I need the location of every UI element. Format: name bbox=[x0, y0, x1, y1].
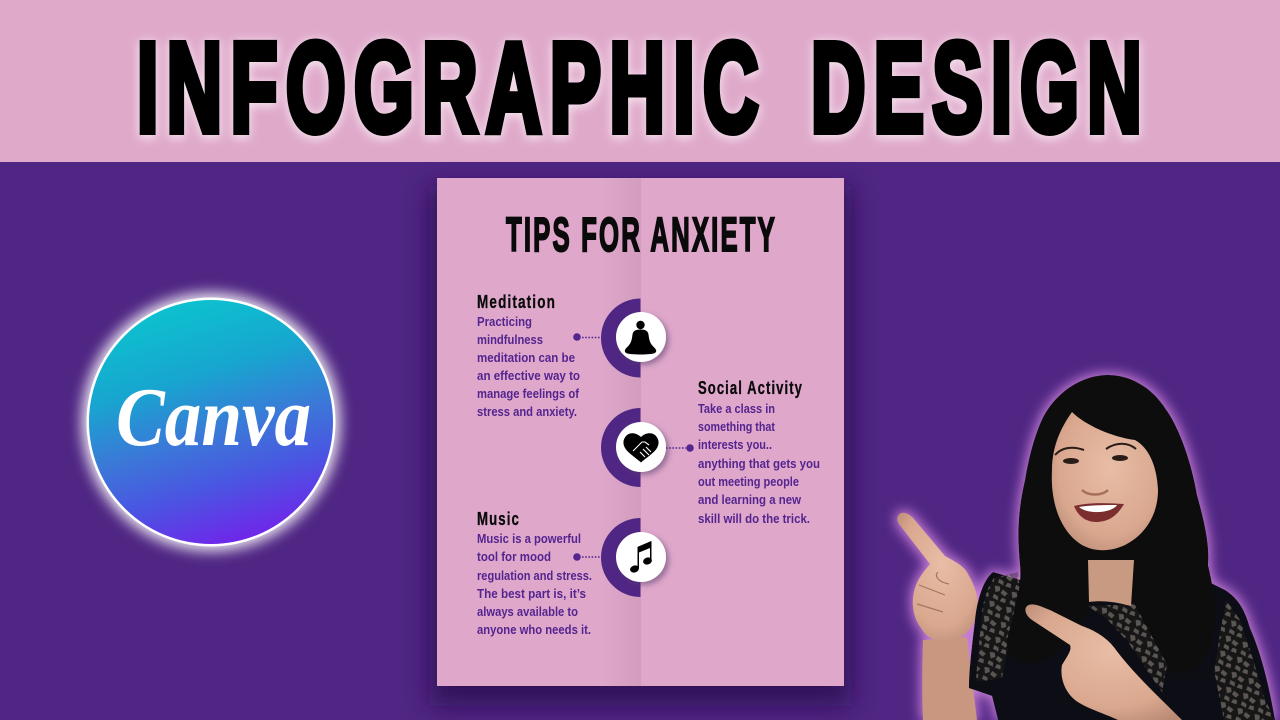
eyebrows bbox=[1055, 444, 1136, 455]
item: Music text: The best part is, it’s bbox=[477, 587, 586, 601]
card heading: TIPS FOR ANXIETY bbox=[506, 209, 777, 262]
badge: music icon bbox=[601, 518, 666, 597]
item: Social Activity text: interests you.. bbox=[698, 438, 772, 452]
item: Music text: anyone who needs it. bbox=[477, 623, 591, 637]
item: Meditation text: meditation can be bbox=[477, 351, 575, 365]
item: Social Activity text: something that bbox=[698, 420, 776, 434]
title: Infographic Design: INFOGRAPHIC bbox=[137, 17, 767, 158]
title banner bbox=[0, 0, 1280, 162]
badge: handshake heart icon bbox=[601, 408, 666, 487]
icon: music notes bbox=[629, 541, 653, 574]
nose bbox=[1082, 490, 1108, 494]
item: Meditation text: Meditation bbox=[477, 292, 556, 312]
pointing hand bbox=[1025, 604, 1182, 720]
shirt bbox=[969, 572, 1275, 720]
item: Meditation text: an effective way to bbox=[477, 369, 580, 383]
icon: meditating figure bbox=[625, 321, 656, 354]
infographic card bbox=[437, 178, 844, 686]
lace shirt detail bbox=[976, 572, 1274, 720]
item: Social Activity text: anything that gets you bbox=[698, 457, 820, 471]
face bbox=[1052, 412, 1158, 550]
item: Meditation text: Practicing bbox=[477, 315, 532, 329]
hair bbox=[1007, 375, 1215, 673]
connector: Music bbox=[573, 553, 603, 561]
item: Social Activity text: Social Activity bbox=[698, 378, 803, 398]
item: Music text: Music is a powerful bbox=[477, 532, 581, 546]
badge: meditation icon bbox=[601, 298, 666, 378]
purple background bbox=[0, 162, 1280, 720]
item: Music text: always available to bbox=[477, 605, 578, 619]
Canva logo bbox=[82, 293, 340, 551]
item: Music text: tool for mood bbox=[477, 550, 551, 564]
eyes bbox=[1063, 455, 1128, 464]
item: Music text: Music bbox=[477, 509, 520, 529]
connector: Social Activity bbox=[666, 444, 694, 452]
item: Social Activity text: and learning a new bbox=[698, 493, 801, 507]
smile bbox=[1074, 503, 1124, 522]
item: Social Activity text: skill will do the trick. bbox=[698, 512, 810, 526]
item: Social Activity text bbox=[698, 378, 820, 526]
title: Infographic Design: INFOGRAPHIC bbox=[137, 19, 767, 160]
item: Social Activity text: Take a class in bbox=[698, 402, 775, 416]
card shadow bbox=[430, 186, 851, 706]
raised arm and pointing hand bbox=[897, 513, 978, 720]
item: Meditation text bbox=[477, 292, 580, 419]
icon: heart with handshake bbox=[623, 433, 659, 462]
Canva wordmark: Canva bbox=[116, 371, 311, 464]
item: Meditation text: mindfulness bbox=[477, 333, 543, 347]
item: Meditation text: manage feelings of bbox=[477, 387, 580, 401]
connector: Meditation bbox=[573, 333, 603, 341]
item: Music text bbox=[477, 509, 592, 637]
item: Meditation text: stress and anxiety. bbox=[477, 405, 577, 419]
presenter photo illustration bbox=[897, 375, 1275, 720]
item: Social Activity text: out meeting people bbox=[698, 475, 799, 489]
neck bbox=[1088, 560, 1134, 606]
item: Music text: regulation and stress. bbox=[477, 569, 592, 583]
